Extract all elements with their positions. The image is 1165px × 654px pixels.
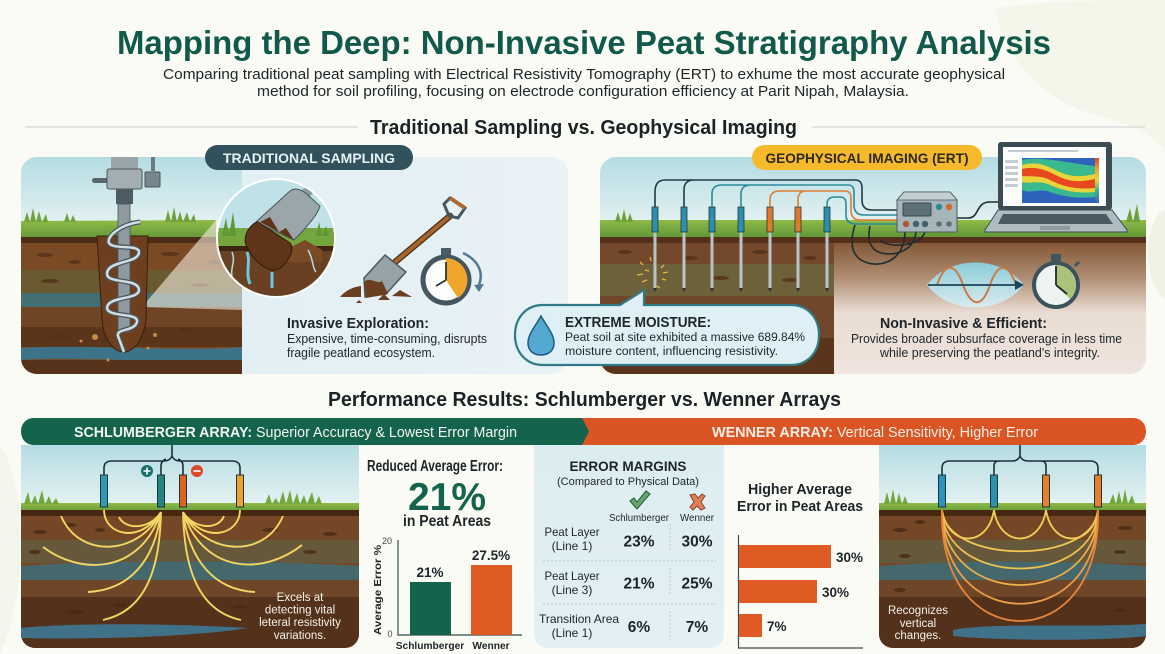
table rows: 30% [681,534,713,550]
text: excels at lateral variations: detecting vital [265,604,335,616]
header bar: schlumberger and wenner [21,418,1146,445]
panel: error margins table: ERROR MARGINS [570,458,686,474]
text: invasive exploration: Invasive Exploration: [287,315,429,332]
header bar: schlumberger and wenner: SCHLUMBERGER ARRAY: Superior Accuracy & Lowest Error Margin [74,425,517,441]
panel: error margins table [534,445,724,648]
text: recognizes vertical changes [888,605,948,642]
soil cross-section with auger [21,157,242,374]
bar chart: average error [372,536,522,652]
electrodes [938,445,1102,507]
table rows [539,524,716,640]
text: non-invasive and efficient: Non-Invasive & Efficient: [880,315,1047,332]
table rows: (Line 1) [552,626,592,640]
column headers: Schlumberger [609,512,669,524]
text: invasive exploration: Expensive, time-consuming, disrupts [287,332,487,346]
text: excels at lateral variations: variations. [274,630,326,642]
table rows: 21% [623,576,655,592]
icon: resistivity meter [897,192,957,232]
panel: wenner scene [879,445,1146,648]
electrode array [652,207,830,292]
bar chart: average error: 20 [382,536,392,546]
table rows: Peat Layer [544,525,600,539]
icon: laptop with resistivity heat map [985,142,1127,232]
text: extreme moisture: EXTREME MOISTURE: [565,314,711,331]
icon: stopwatch [423,248,484,303]
table rows: Transition Area [539,612,619,626]
icon: wave lens [927,262,1024,308]
text: invasive exploration: fragile peatland ecosystem. [287,346,435,360]
bar chart: average error: Schlumberger [396,641,464,652]
header bar: schlumberger and wenner: WENNER ARRAY: Vertical Sensitivity, Higher Error [712,425,1038,441]
panel: reduced average error: in Peat Areas [403,513,491,530]
table rows: (Line 1) [552,539,592,553]
subtitle: method for soil profiling, focusing on electrode configuration efficiency at Parit Nipah, Malaysia. [257,83,909,100]
table rows: 25% [681,576,713,592]
panel: reduced average error [367,458,522,652]
panel: reduced average error: 21% [408,476,486,519]
table rows: 6% [628,619,650,636]
panel: traditional sampling [21,145,568,374]
panel: reduced average error: Reduced Average Error: [367,458,503,475]
electrodes and polarity [100,445,244,507]
section heading: performance results: Performance Results: Schlumberger vs. Wenner Arrays [328,389,841,411]
text: excels at lateral variations: Excels at [277,592,324,604]
subtitle: Comparing traditional peat sampling with Electrical Resistivity Tomography (ERT) to exhume the most accurate geophysical [163,66,1005,83]
text: non-invasive and efficient: while preserving the peatland's integrity. [879,346,1100,360]
panel: geophysical imaging [600,142,1146,374]
current lines [43,510,302,620]
icon: auger drill [80,157,160,362]
text: invasive exploration [287,315,487,360]
horizontal bar chart: 30% [836,550,863,565]
text: non-invasive and efficient [851,315,1122,360]
text: excels at lateral variations: leteral resistivity [259,617,341,629]
cables [655,180,998,264]
icon: magnified soil core [216,178,336,300]
icon: shovel [340,198,465,303]
table rows: 23% [623,534,655,550]
bar chart: average error: Average Error % [372,544,384,635]
panel: schlumberger scene [21,445,359,648]
horizontal bar chart: 30% [822,585,849,600]
bar chart: average error: Wenner [472,641,510,652]
section heading: sampling vs imaging: Traditional Sampling vs. Geophysical Imaging [370,117,797,139]
icon: cross [690,494,705,510]
label: geophysical imaging [752,145,982,170]
light cone [142,220,242,310]
text: extreme moisture: moisture content, influencing resistivity. [565,344,778,358]
column headers: Wenner [680,512,714,524]
bar chart: average error: 21% [416,565,444,580]
panel: higher average error [737,482,863,648]
panel: higher average error: Error in Peat Areas [737,499,863,515]
text: non-invasive and efficient: Provides broader subsurface coverage in less time [851,332,1122,346]
text: excels at lateral variations [259,592,341,642]
column headers [609,512,714,524]
bar chart: average error: 0 [387,629,393,639]
table rows: (Line 3) [552,583,592,597]
icon: check [630,491,650,509]
table rows: 7% [686,619,708,636]
text: extreme moisture [565,314,805,358]
subtitle [163,66,1005,100]
sensor sparks [637,257,668,288]
label: traditional sampling [205,145,413,170]
current arcs [942,510,1098,621]
text: recognizes vertical changes: vertical [900,618,936,630]
table rows: Peat Layer [544,569,600,583]
icon: water drop [528,316,554,355]
text: recognizes vertical changes: changes. [895,630,941,642]
panel: error margins table: (Compared to Physical Data) [557,476,699,488]
text: recognizes vertical changes: Recognizes [888,605,948,617]
text: extreme moisture: Peat soil at site exhibited a massive 689.84% [565,330,805,344]
callout: extreme moisture [515,290,819,365]
bar chart: average error: 27.5% [472,548,510,563]
title: Mapping the Deep: Non-Invasive Peat Stratigraphy Analysis [117,24,1051,61]
panel: higher average error: Higher Average [748,482,852,498]
bore hole [97,236,148,352]
horizontal bar chart [738,535,863,648]
label: traditional sampling: TRADITIONAL SAMPLING [223,150,395,166]
horizontal bar chart: 7% [767,619,787,634]
label: geophysical imaging: GEOPHYSICAL IMAGING (ERT) [766,150,968,166]
icon: stopwatch green [1034,254,1080,307]
